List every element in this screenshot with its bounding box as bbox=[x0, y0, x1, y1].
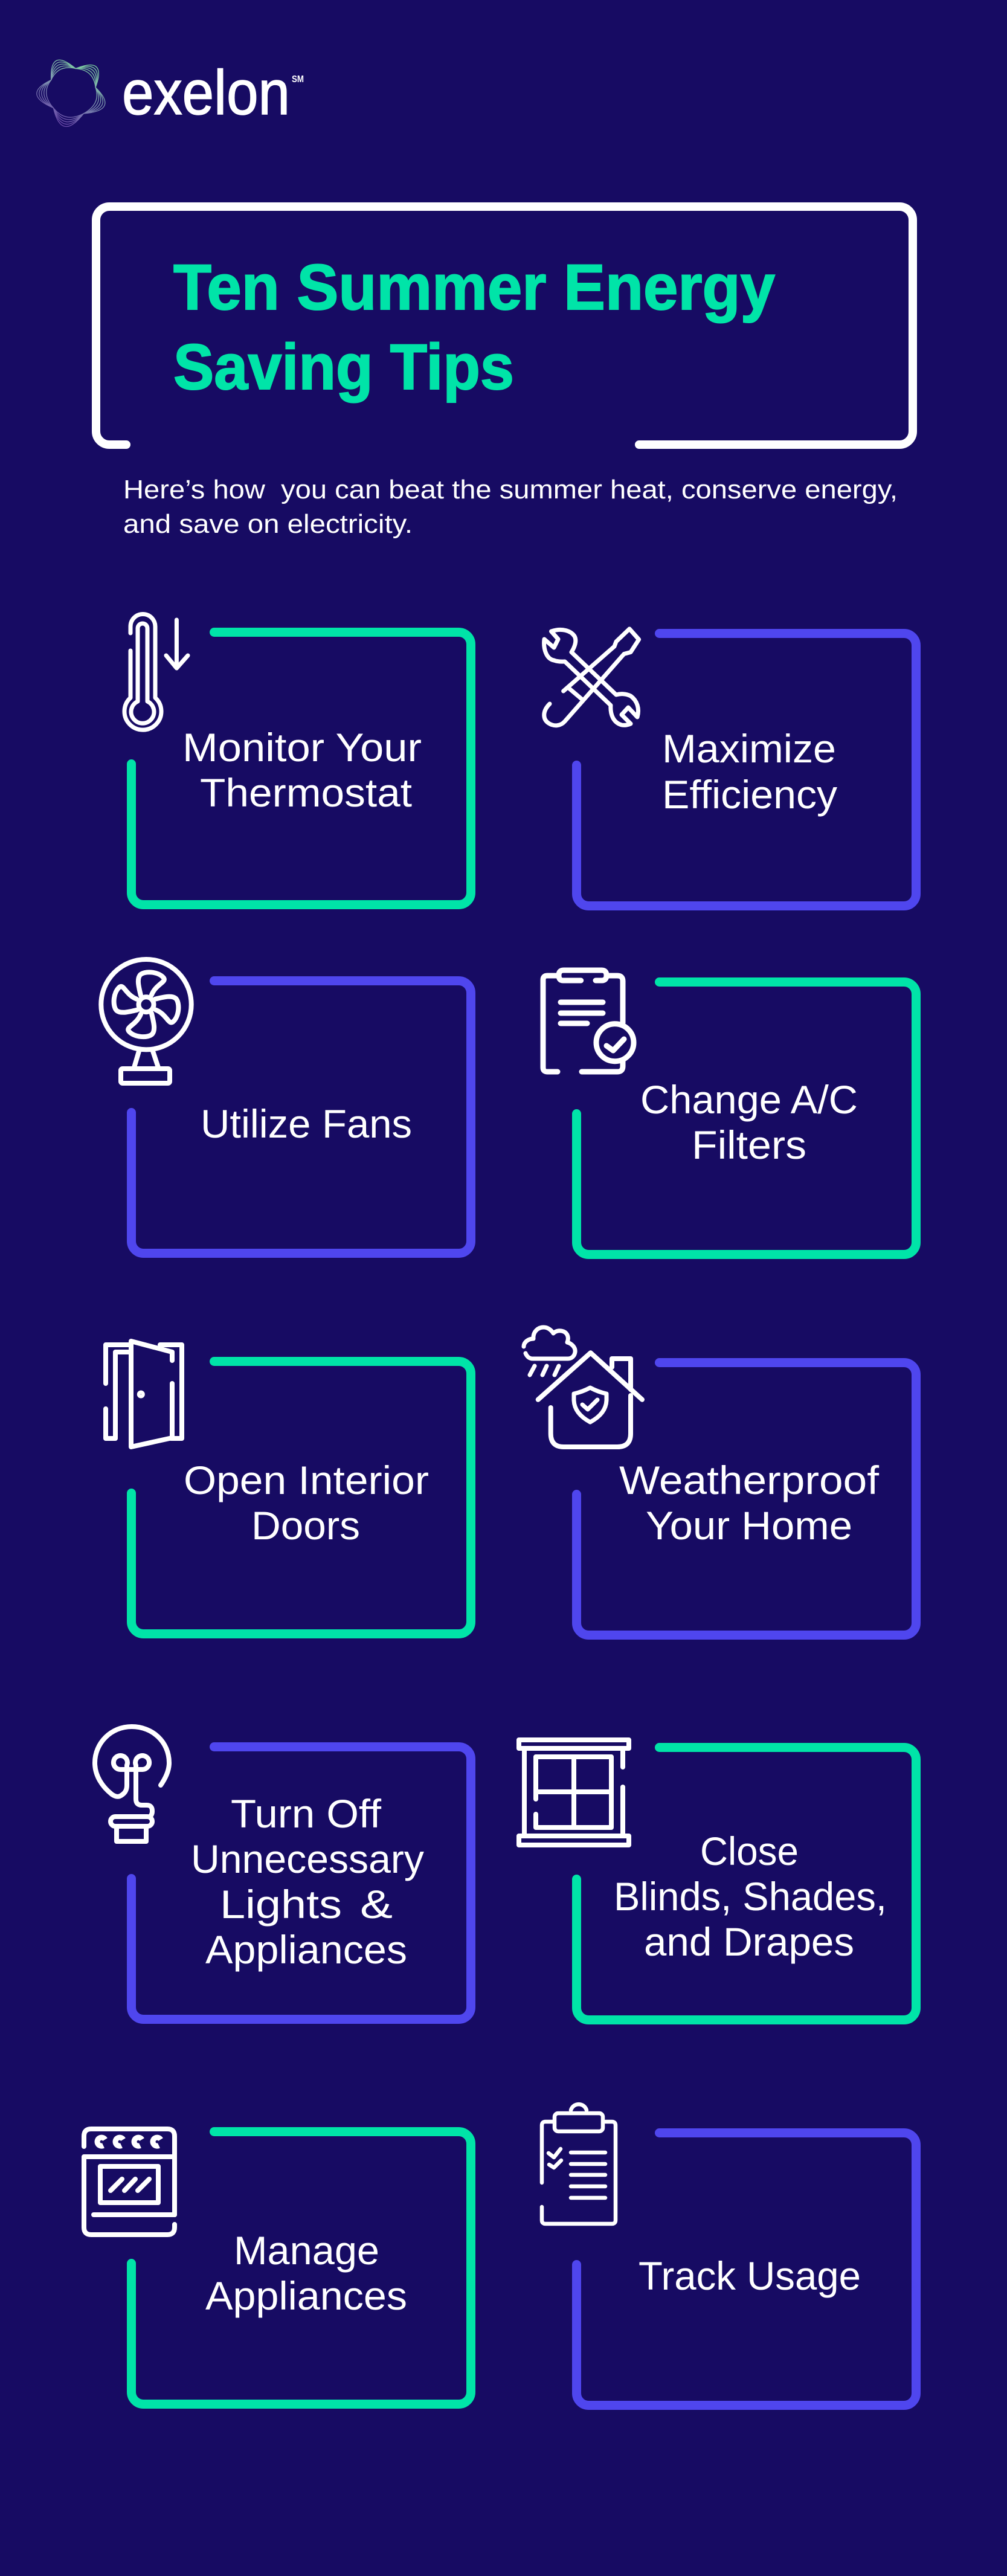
label: and Drapes bbox=[644, 1919, 854, 1964]
label: & bbox=[360, 1882, 393, 1927]
label: Open Interior bbox=[184, 1458, 429, 1502]
frame bbox=[576, 1747, 916, 2020]
logo wordmark: exelon bbox=[122, 58, 290, 128]
label: Your Home bbox=[646, 1503, 852, 1548]
label: Thermostat bbox=[200, 770, 412, 815]
label: Weatherproof bbox=[619, 1458, 880, 1502]
label: Appliances bbox=[205, 1927, 407, 1972]
panel: Monitor Your Thermostat bbox=[124, 614, 471, 905]
icon: thermometer with down arrow bbox=[124, 614, 188, 730]
panel: Open Interior Doors bbox=[106, 1341, 471, 1634]
frame bbox=[576, 633, 916, 906]
label: Manage bbox=[234, 2228, 379, 2273]
label: Unnecessary bbox=[191, 1837, 424, 1881]
panel: Maximize Efficiency bbox=[544, 629, 916, 906]
label: Blinds, Shades, bbox=[614, 1874, 887, 1919]
frame bbox=[576, 1363, 916, 1635]
intro text: Here’s how you can beat the summer heat, conserve energy, bbox=[123, 475, 898, 504]
icon: fan bbox=[101, 959, 191, 1083]
icon: exelon wave ring bbox=[37, 60, 105, 126]
label: Filters bbox=[692, 1122, 806, 1167]
label: Lights bbox=[220, 1882, 342, 1927]
label: Doors bbox=[251, 1503, 360, 1548]
title frame bbox=[96, 207, 913, 445]
service mark: SM bbox=[292, 74, 304, 85]
title: Ten Summer Energy bbox=[173, 251, 775, 323]
panel: Manage Appliances bbox=[84, 2129, 471, 2404]
icon: open door bbox=[106, 1341, 182, 1447]
frame bbox=[576, 2133, 916, 2406]
label: Appliances bbox=[205, 2273, 407, 2318]
frame bbox=[132, 1362, 471, 1634]
icon: clipboard with check bbox=[543, 970, 634, 1072]
icon: house with rain cloud and shield bbox=[524, 1327, 642, 1447]
icon: oven bbox=[84, 2129, 175, 2235]
frame bbox=[132, 632, 471, 905]
frame bbox=[132, 2131, 471, 2404]
label: Turn Off bbox=[231, 1791, 382, 1836]
label: Change A/C bbox=[640, 1077, 858, 1122]
label: Track Usage bbox=[639, 2253, 861, 2298]
icon: window bbox=[519, 1740, 629, 1845]
panel: Change A/C Filters bbox=[543, 970, 916, 1254]
frame bbox=[132, 1747, 471, 2019]
panel: Turn Off Unnecessary Lights & Appliances bbox=[95, 1727, 471, 2019]
panel: Track Usage bbox=[542, 2104, 916, 2406]
label: Efficiency bbox=[662, 772, 837, 817]
panel: Weatherproof Your Home bbox=[524, 1327, 916, 1635]
title: Saving Tips bbox=[173, 330, 514, 403]
label: Monitor Your bbox=[182, 725, 422, 770]
icon: wrench and screwdriver bbox=[544, 629, 639, 726]
label: Close bbox=[700, 1829, 799, 1873]
panel: Utilize Fans bbox=[101, 959, 471, 1253]
frame bbox=[576, 982, 916, 1254]
frame bbox=[132, 981, 471, 1253]
logo: exelon bbox=[37, 58, 304, 128]
label: Utilize Fans bbox=[201, 1101, 412, 1146]
label: Maximize bbox=[662, 726, 836, 771]
icon: checklist clipboard bbox=[542, 2104, 616, 2224]
title panel bbox=[96, 207, 913, 445]
icon: light bulb bbox=[95, 1727, 169, 1841]
intro text: and save on electricity. bbox=[123, 509, 413, 539]
panel: Close Blinds, Shades, and Drapes bbox=[519, 1740, 916, 2020]
